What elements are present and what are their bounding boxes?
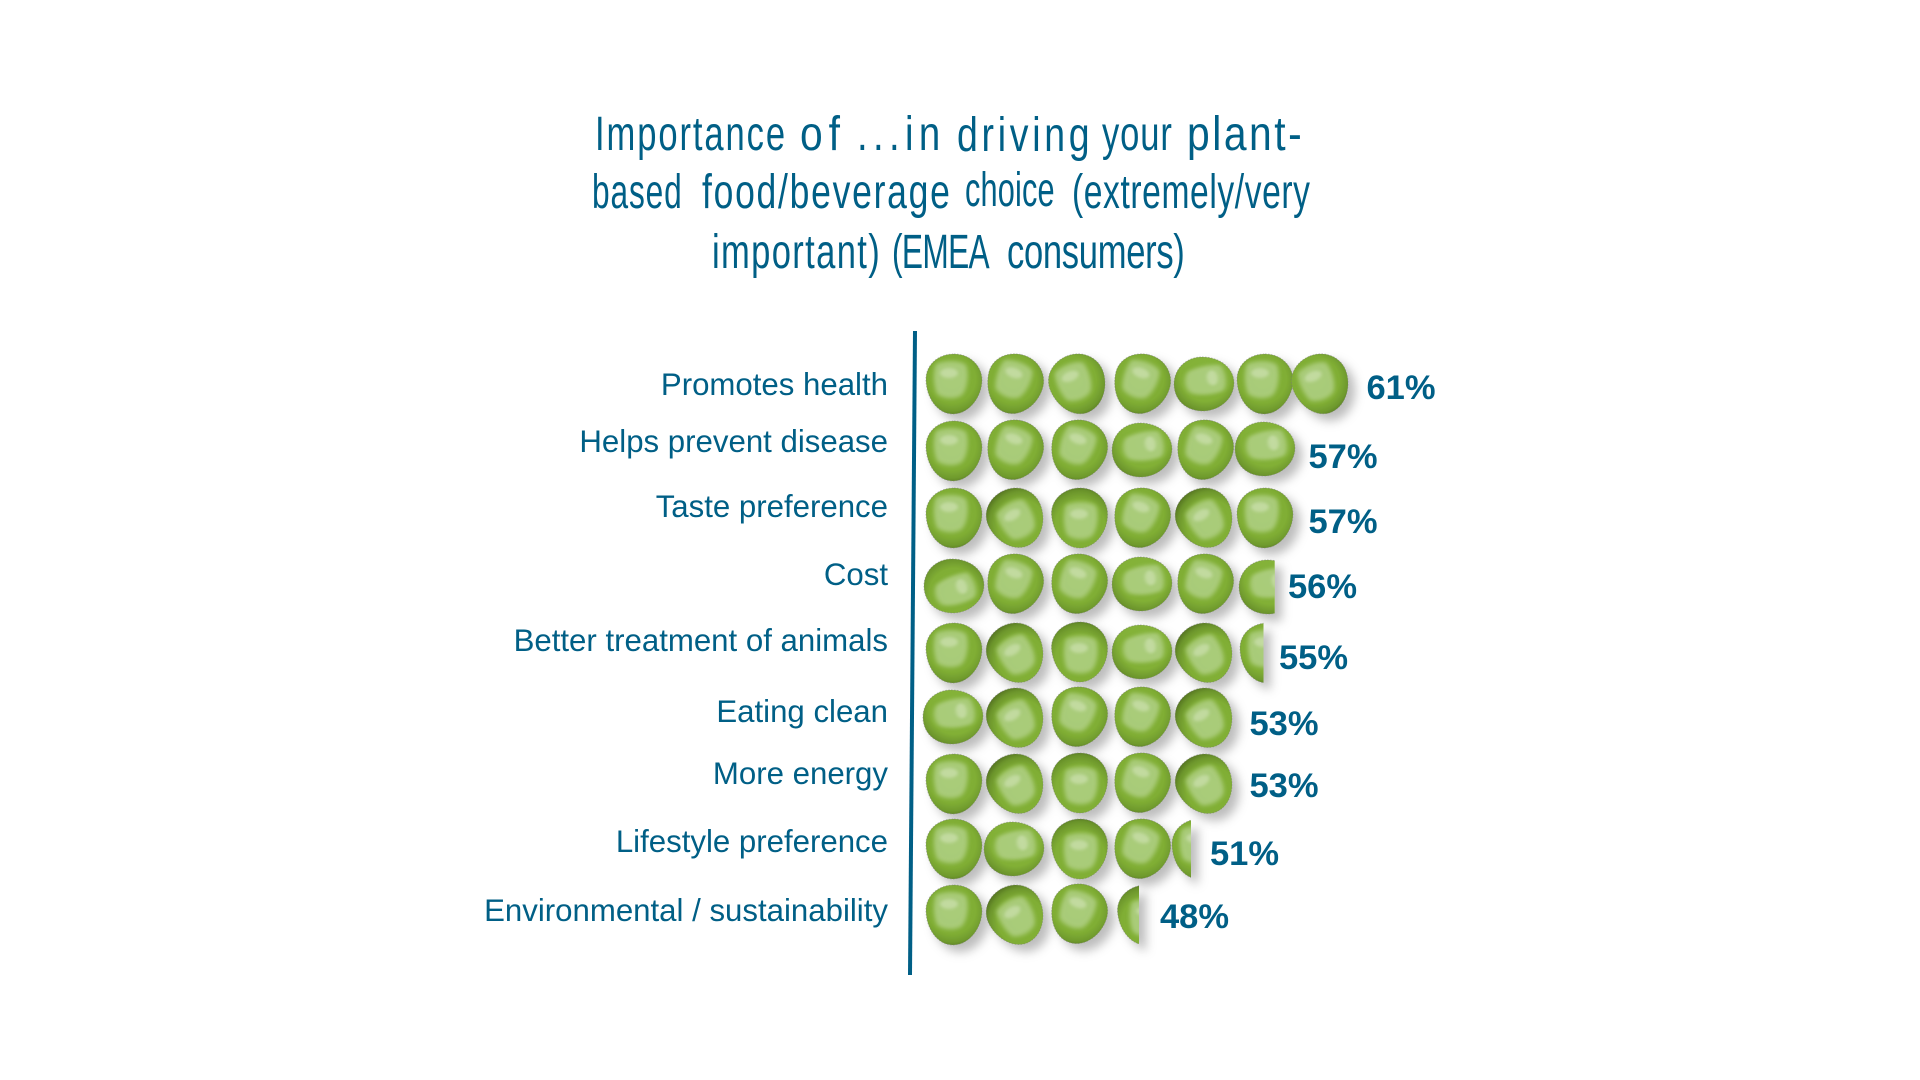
row: More energy: More energy (713, 756, 888, 791)
title: ...in (857, 108, 940, 161)
row: Taste preference: Taste preference (656, 489, 888, 524)
title: choice (965, 163, 1055, 217)
title: plant- (1187, 108, 1302, 161)
row: More energy (713, 744, 1319, 824)
title: consumers) (1007, 224, 1185, 278)
title: your (1102, 106, 1172, 160)
row: Eating clean: Eating clean (716, 694, 888, 729)
title: of (800, 108, 841, 161)
row: Cost (824, 549, 1357, 621)
row: Lifestyle preference: 51% (1210, 835, 1279, 873)
row: Eating clean (716, 678, 1319, 758)
row: Promotes health: 61% (1366, 369, 1436, 407)
row: Cost: 56% (1288, 568, 1357, 606)
title: Importance (595, 106, 785, 160)
row: Better treatment of animals: 55% (1279, 639, 1348, 677)
row: Better treatment of animals: Better treatment of animals (514, 623, 888, 658)
row: More energy: 53% (1250, 767, 1319, 805)
title: (extremely/very (1072, 164, 1310, 218)
row: Helps prevent disease: 57% (1308, 438, 1378, 476)
row: Environmental / sustainability (484, 875, 1229, 955)
title: (EMEA (892, 224, 990, 279)
row: Lifestyle preference (616, 814, 1279, 884)
row: Lifestyle preference: Lifestyle preference (616, 824, 888, 859)
row: Helps prevent disease (579, 415, 1378, 485)
row: Taste preference: 57% (1308, 503, 1378, 541)
title: important) (712, 224, 880, 278)
row: Environmental / sustainability: 48% (1160, 898, 1229, 936)
axis line (908, 331, 917, 975)
row: Helps prevent disease: Helps prevent disease (579, 424, 888, 459)
row: Eating clean: 53% (1250, 705, 1319, 743)
title (592, 106, 1310, 279)
title: driving (957, 109, 1090, 162)
row: Promotes health: Promotes health (661, 367, 888, 402)
row: Taste preference (656, 478, 1378, 558)
row: Cost: Cost (824, 557, 888, 592)
row: Environmental / sustainability: Environmental / sustainability (484, 893, 888, 928)
title: based (592, 164, 682, 219)
row: Better treatment of animals (514, 613, 1348, 693)
title: food/beverage (702, 165, 950, 218)
row: Promotes health (661, 346, 1436, 422)
